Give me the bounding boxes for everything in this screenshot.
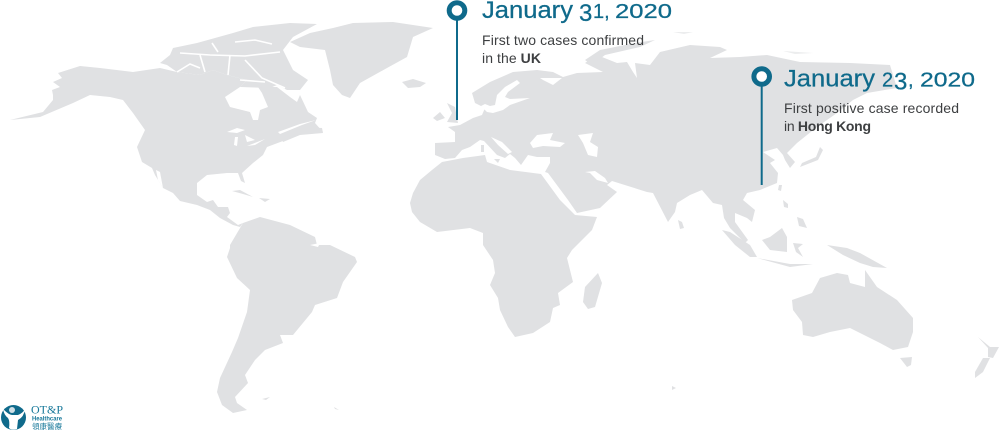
date heading: January 31, 2020: 2020 xyxy=(615,1,672,23)
logo Chinese name: 領康醫療 xyxy=(32,421,62,431)
map: South America xyxy=(217,217,357,413)
map: Iceland xyxy=(402,79,426,88)
logo subtitle: Healthcare xyxy=(32,416,63,422)
date heading: January 31, 2020: 3 xyxy=(579,0,592,27)
date heading: January 23, 2020: , xyxy=(908,70,914,92)
date heading: January 23, 2020: 3 xyxy=(894,68,907,96)
map: British Isles xyxy=(433,103,458,123)
map: Arctic islands xyxy=(160,23,317,90)
date heading: January 23, 2020: January xyxy=(784,66,875,92)
map: Eurasia xyxy=(435,45,897,243)
map: Australia xyxy=(792,270,913,350)
map: Greenland xyxy=(290,22,433,98)
date heading: January 23, 2020: 2020 xyxy=(920,70,975,92)
map: Africa xyxy=(410,155,597,337)
map: Southeast Asian islands xyxy=(678,185,887,268)
date heading: January 31, 2020: 1, xyxy=(593,1,610,23)
logo icon: figure in circle xyxy=(1,405,26,430)
description: UK line 2: in the UK xyxy=(482,50,541,66)
date heading: January 23, 2020: 2 xyxy=(882,70,893,92)
pin: Hong Kong xyxy=(754,69,770,185)
map: North America xyxy=(10,66,323,227)
map: New Zealand xyxy=(975,337,999,378)
map: small islands xyxy=(232,32,813,410)
description: UK line 1: First two cases confirmed xyxy=(482,32,644,48)
description: Hong Kong line 2: in Hong Kong xyxy=(784,118,871,134)
map: Maritime Canada xyxy=(280,127,323,142)
map: Japan xyxy=(800,147,823,167)
description: Hong Kong line 1: First positive case recorded xyxy=(784,100,959,116)
logo wordmark: OT&P xyxy=(31,402,63,416)
map: Novaya Zemlya xyxy=(585,40,655,65)
pin: UK xyxy=(449,3,465,120)
logo: OT&P Healthcare xyxy=(1,402,63,431)
map: Tasmania xyxy=(900,357,912,367)
map: Arctic channels xyxy=(177,40,285,88)
map: inland seas and lakes xyxy=(156,78,608,247)
map: Madagascar xyxy=(583,273,602,309)
